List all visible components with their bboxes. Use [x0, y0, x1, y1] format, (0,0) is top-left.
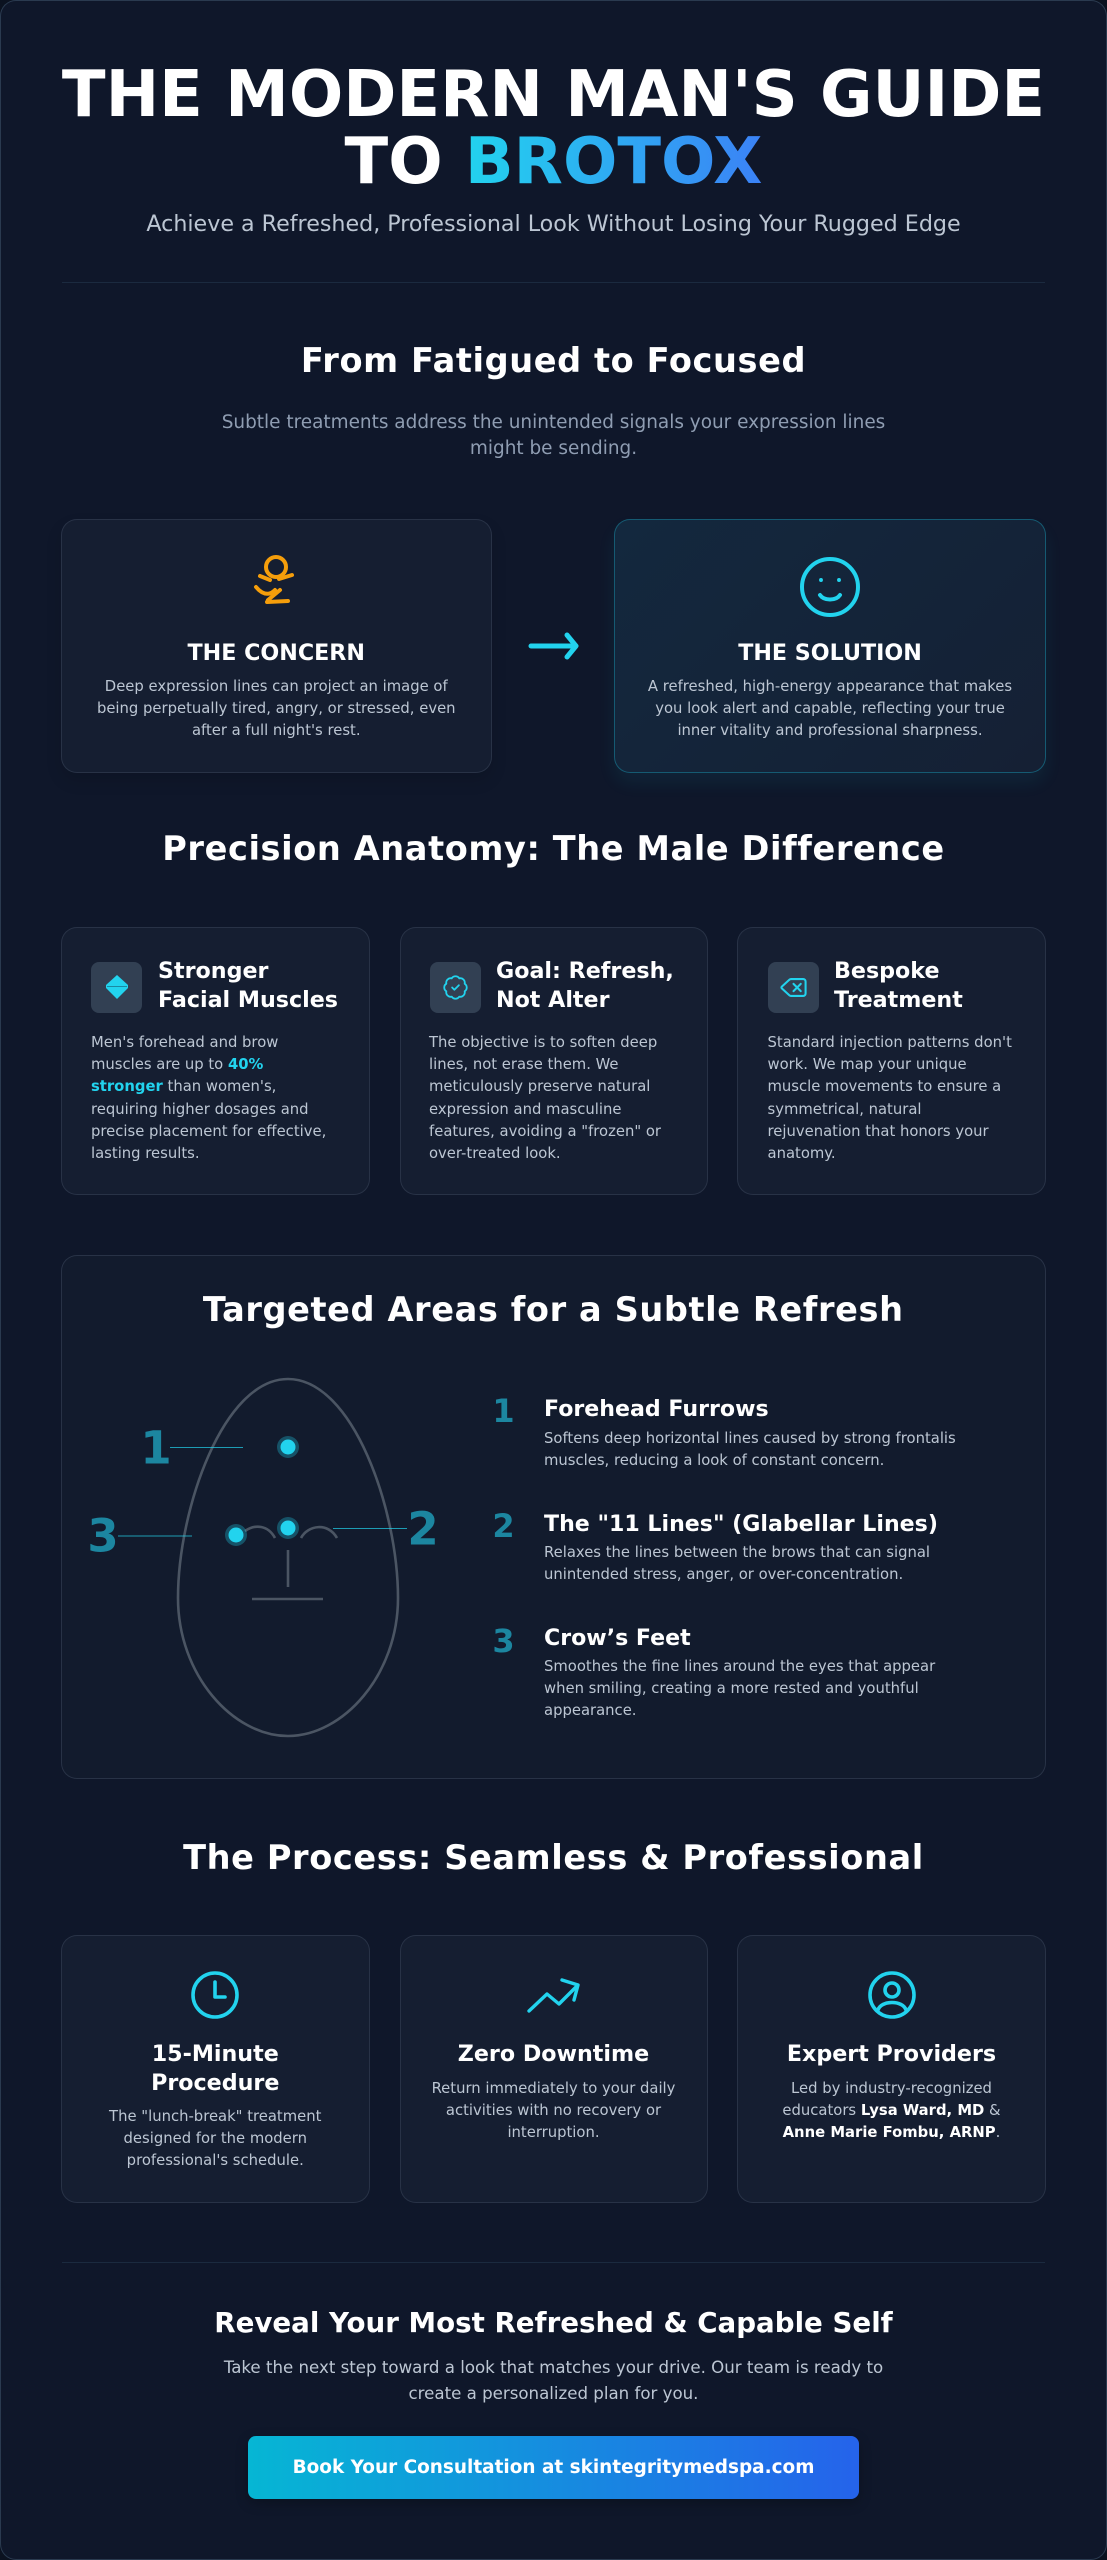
icon: tired face: [254, 555, 294, 604]
panel: goal refresh not alter: [400, 927, 708, 1195]
heading: the process: The Process: Seamless & Professional: [183, 1838, 924, 1877]
solution text: you look alert and capable, reflecting your true: [655, 700, 1005, 717]
card text: work. We map your unique: [768, 1056, 967, 1073]
callout 2: [333, 1502, 439, 1555]
callout 1: 1: [140, 1421, 172, 1474]
concern text: [97, 678, 456, 739]
arrow: concern to solution: [528, 632, 579, 660]
list item: forehead furrows: 1: [492, 1392, 515, 1430]
cta text: [224, 2358, 883, 2403]
card heading: Stronger: [158, 958, 268, 984]
icon: trend arrow: [527, 1978, 580, 2013]
list item: 11 lines: unintended stress, anger, or over-concentration.: [544, 1566, 903, 1583]
icon: person: [868, 1971, 916, 2019]
card heading: Goal: Refresh,: [496, 958, 674, 984]
card heading: Facial Muscles: [158, 987, 338, 1013]
list item: forehead furrows: Forehead Furrows: [544, 1396, 769, 1422]
heading: from fatigued to focused: From Fatigued to Focused: [301, 341, 806, 380]
list item: crow's feet: Smoothes the fine lines around the eyes that appear: [544, 1658, 935, 1674]
panel: the solution: [614, 519, 1046, 773]
card text: symmetrical, natural: [768, 1101, 922, 1118]
title: THE MODERN MAN'S GUIDE: [62, 58, 1045, 132]
call to action: [214, 2306, 893, 2499]
solution text: [648, 678, 1012, 739]
card text: [428, 1034, 661, 1162]
cta text: create a personalized plan for you.: [409, 2384, 698, 2403]
icon: clock: [191, 1971, 239, 2019]
marker 3: eye corner: [225, 1524, 247, 1546]
solution heading: THE SOLUTION: [738, 640, 922, 666]
list item: crow's feet: appearance.: [544, 1702, 636, 1719]
card text: over-treated look.: [429, 1145, 561, 1162]
card heading: [834, 958, 963, 1013]
list item: 11 lines: Relaxes the lines between the brows that can signal: [544, 1544, 930, 1560]
card text: Anne Marie Fombu, ARNP.: [783, 2124, 1000, 2141]
concern text: after a full night's rest.: [192, 722, 361, 739]
list item: 11 lines: 2: [492, 1507, 515, 1545]
card text: interruption.: [507, 2124, 600, 2141]
section intro text: might be sending.: [470, 438, 637, 459]
card text: Led by industry-recognized: [791, 2080, 992, 2096]
panel: targeted areas: [60, 1255, 1046, 1779]
panel: expert providers: [737, 1935, 1046, 2203]
list item: 11 lines: [492, 1507, 938, 1583]
card heading: Bespoke: [834, 958, 940, 984]
card heading: Not Alter: [496, 987, 610, 1013]
card text: precise placement for effective,: [91, 1123, 326, 1140]
card text: lines, not erase them. We: [429, 1056, 618, 1073]
cta button: [248, 2436, 859, 2499]
heading: targeted areas: Targeted Areas for a Subtle Refresh: [203, 1290, 904, 1329]
panel: zero downtime: [400, 1935, 708, 2203]
marker 2: glabella: [277, 1517, 299, 1539]
card text: requiring higher dosages and: [91, 1101, 309, 1118]
card text: designed for the modern: [124, 2130, 307, 2147]
card text: [432, 2080, 675, 2141]
card text: expression and masculine: [429, 1101, 621, 1118]
title: [62, 58, 1045, 198]
card heading: Procedure: [151, 2070, 279, 2096]
card text: Return immediately to your daily: [432, 2080, 675, 2096]
callout 3: [87, 1509, 192, 1562]
list item: crow's feet: Crow’s Feet: [544, 1624, 691, 1650]
card text: muscles are up to 40%: [91, 1056, 263, 1073]
cta heading: Reveal Your Most Refreshed & Capable Self: [214, 2306, 893, 2339]
card heading: Zero Downtime: [458, 2040, 649, 2066]
cta button: Book Your Consultation at skintegritymedspa.com: [293, 2457, 814, 2478]
card text: The objective is to soften deep: [429, 1034, 657, 1051]
card heading: [151, 2040, 279, 2096]
card heading: [496, 958, 674, 1013]
marker 1: forehead: [277, 1436, 299, 1458]
card text: [768, 1034, 1012, 1162]
face outline: [178, 1379, 398, 1736]
concern text: being perpetually tired, angry, or stressed, even: [97, 700, 456, 717]
callout 2: 2: [407, 1502, 439, 1555]
facial features: [245, 1527, 337, 1599]
callout 1: [140, 1421, 243, 1474]
panel: 15-minute procedure: [60, 1935, 370, 2203]
subtitle: Achieve a Refreshed, Professional Look Without Losing Your Rugged Edge: [146, 211, 961, 237]
concern text: Deep expression lines can project an image of: [105, 678, 448, 694]
card text: professional's schedule.: [127, 2152, 304, 2169]
solution text: inner vitality and professional sharpness.: [677, 722, 983, 739]
icon: delete tag: [768, 962, 818, 1013]
icon: diamond: [91, 962, 142, 1013]
heading: precision anatomy: Precision Anatomy: The Male Difference: [162, 829, 945, 868]
section intro text: Subtle treatments address the unintended signals your expression lines: [222, 412, 885, 433]
face diagram: [87, 1378, 439, 1738]
card text: [91, 1034, 326, 1162]
card text: lasting results.: [91, 1145, 200, 1162]
card heading: 15-Minute: [152, 2040, 279, 2066]
card text: Men's forehead and brow: [91, 1034, 278, 1051]
card text: educators Lysa Ward, MD &: [782, 2102, 1001, 2119]
card text: features, avoiding a "frozen" or: [429, 1123, 661, 1140]
list item: forehead furrows: [492, 1392, 956, 1469]
card text: Standard injection patterns don't: [768, 1034, 1012, 1051]
section intro text: [222, 412, 885, 459]
list item: 11 lines: The "11 Lines" (Glabellar Lines): [544, 1511, 938, 1537]
card text: activities with no recovery or: [446, 2102, 661, 2119]
card text: meticulously preserve natural: [429, 1078, 650, 1095]
icon: smiling face: [800, 557, 860, 617]
card text: [782, 2080, 1001, 2141]
solution text: A refreshed, high-energy appearance that makes: [648, 678, 1012, 694]
card text: muscle movements to ensure a: [768, 1078, 1001, 1095]
list item: crow's feet: 3: [492, 1622, 515, 1660]
card heading: [158, 958, 338, 1013]
title: TO BROTOX: [345, 124, 762, 198]
card text: The "lunch-break" treatment: [109, 2108, 321, 2125]
list item: crow's feet: when smiling, creating a more rested and youthful: [544, 1680, 919, 1697]
cta text: Take the next step toward a look that matches your drive. Our team is ready to: [224, 2358, 883, 2377]
list item: crow's feet: [492, 1622, 936, 1719]
panel: the concern: [60, 519, 492, 773]
list item: forehead furrows: muscles, reducing a look of constant concern.: [544, 1452, 884, 1469]
panel: bespoke treatment: [737, 927, 1046, 1195]
card text: anatomy.: [768, 1145, 836, 1162]
list item: forehead furrows: Softens deep horizontal lines caused by strong frontalis: [544, 1430, 956, 1447]
card heading: Expert Providers: [787, 2040, 996, 2066]
concern heading: THE CONCERN: [188, 640, 365, 666]
card text: rejuvenation that honors your: [768, 1123, 989, 1140]
callout 3: 3: [87, 1509, 119, 1562]
icon: badge check: [430, 962, 481, 1013]
card text: stronger than women's,: [91, 1078, 276, 1095]
panel: stronger facial muscles: [60, 927, 370, 1195]
card heading: Treatment: [834, 987, 963, 1013]
card text: [108, 2108, 322, 2169]
